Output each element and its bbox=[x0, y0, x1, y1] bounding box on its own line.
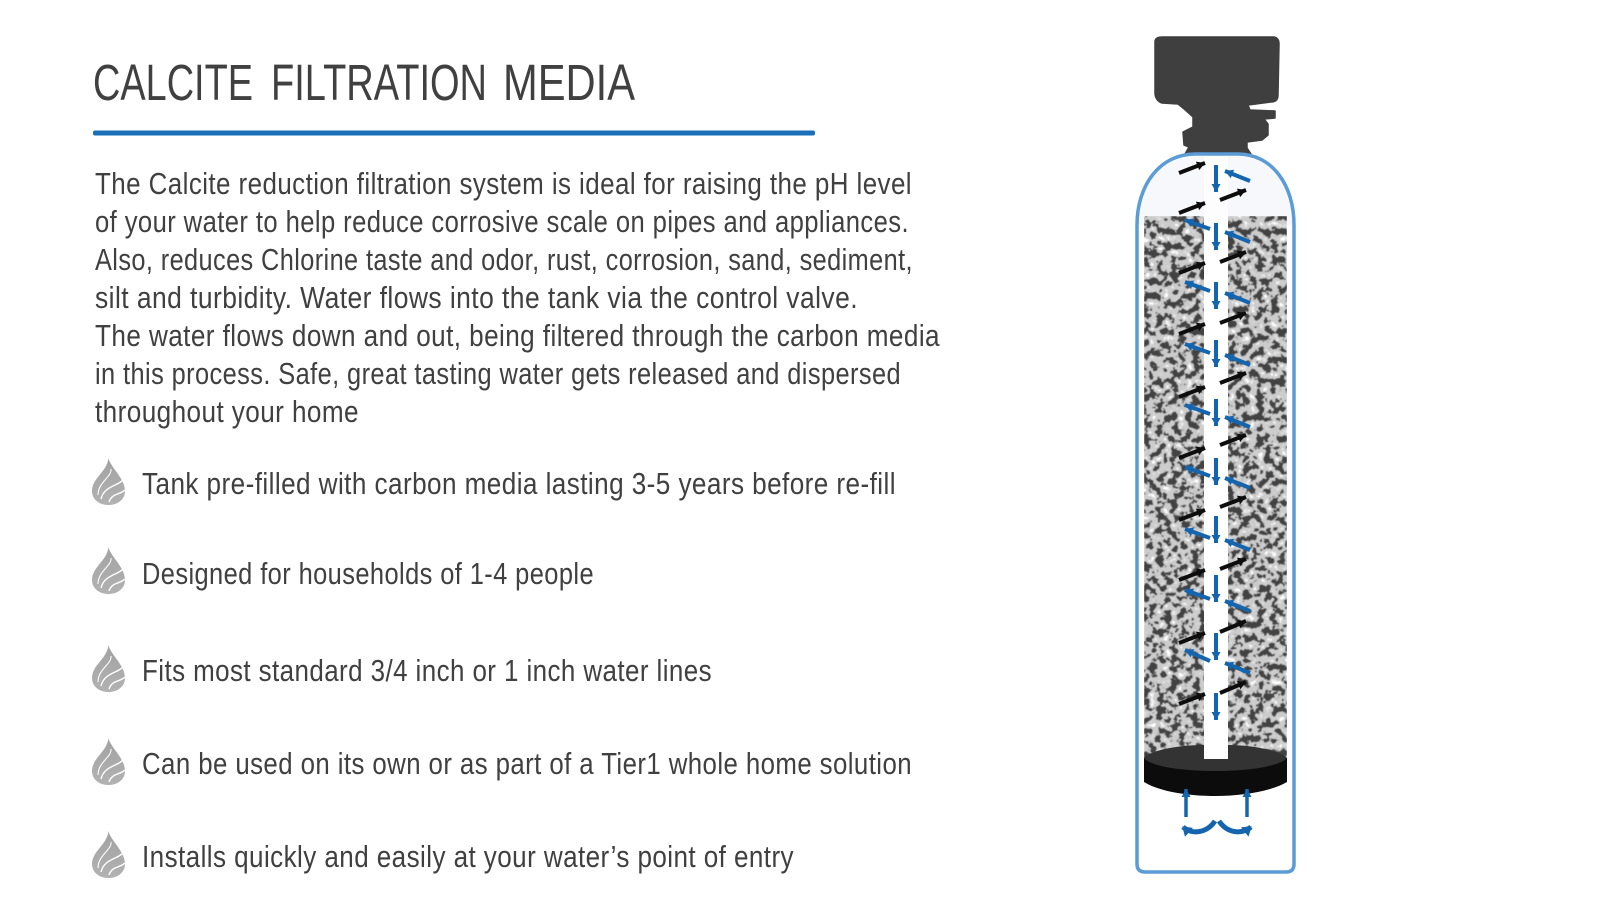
bullet: installation: Installs quickly and easily at your water’s point of entry bbox=[142, 839, 794, 874]
black flow arrows bbox=[1179, 163, 1246, 704]
blue flow arrows bbox=[1185, 165, 1250, 720]
base plate bbox=[1144, 745, 1287, 796]
bullet: installation bbox=[92, 831, 794, 878]
control valve head bbox=[1155, 37, 1279, 154]
bullet: pre-filled tank bbox=[92, 458, 896, 505]
title underline bbox=[93, 130, 815, 136]
bullet: pre-filled tank: Tank pre-filled with carbon media lasting 3-5 years before re-fill bbox=[142, 466, 896, 501]
intake arrows below base bbox=[1183, 789, 1251, 832]
tank dome fill bbox=[1137, 154, 1294, 225]
center riser tube upper section bbox=[1204, 156, 1228, 218]
icon: water drop bbox=[92, 547, 125, 594]
filter tank diagram bbox=[1137, 37, 1294, 872]
description paragraph bbox=[95, 166, 940, 429]
tank outline bbox=[1137, 154, 1294, 872]
title: MEDIA bbox=[503, 54, 635, 111]
description paragraph: The Calcite reduction filtration system is ideal for raising the pH level bbox=[95, 166, 912, 201]
bullet: water lines: Fits most standard 3/4 inch or 1 inch water lines bbox=[142, 653, 712, 688]
description paragraph: silt and turbidity. Water flows into the tank via the control valve. bbox=[95, 280, 858, 315]
description paragraph: throughout your home bbox=[95, 394, 359, 429]
description paragraph: in this process. Safe, great tasting water gets released and dispersed bbox=[95, 356, 901, 391]
bullet: whole home solution bbox=[92, 738, 912, 785]
title: CALCITE bbox=[93, 54, 253, 111]
icon: water drop bbox=[92, 738, 125, 785]
center riser tube bbox=[1204, 216, 1228, 758]
calcite media bed bbox=[1144, 216, 1287, 761]
description paragraph: of your water to help reduce corrosive scale on pipes and appliances. bbox=[95, 204, 909, 239]
bullet: water lines bbox=[92, 645, 712, 692]
icon: water drop bbox=[92, 831, 125, 878]
bullet: household size: Designed for households of 1-4 people bbox=[142, 556, 594, 591]
bullet: household size bbox=[92, 547, 594, 594]
description paragraph: Also, reduces Chlorine taste and odor, rust, corrosion, sand, sediment, bbox=[95, 242, 913, 277]
description paragraph: The water flows down and out, being filtered through the carbon media bbox=[95, 318, 940, 353]
title bbox=[93, 54, 635, 111]
title: FILTRATION bbox=[271, 54, 487, 111]
icon: water drop bbox=[92, 645, 125, 692]
bullet: whole home solution: Can be used on its own or as part of a Tier1 whole home solution bbox=[142, 746, 912, 781]
icon: water drop bbox=[92, 458, 125, 505]
